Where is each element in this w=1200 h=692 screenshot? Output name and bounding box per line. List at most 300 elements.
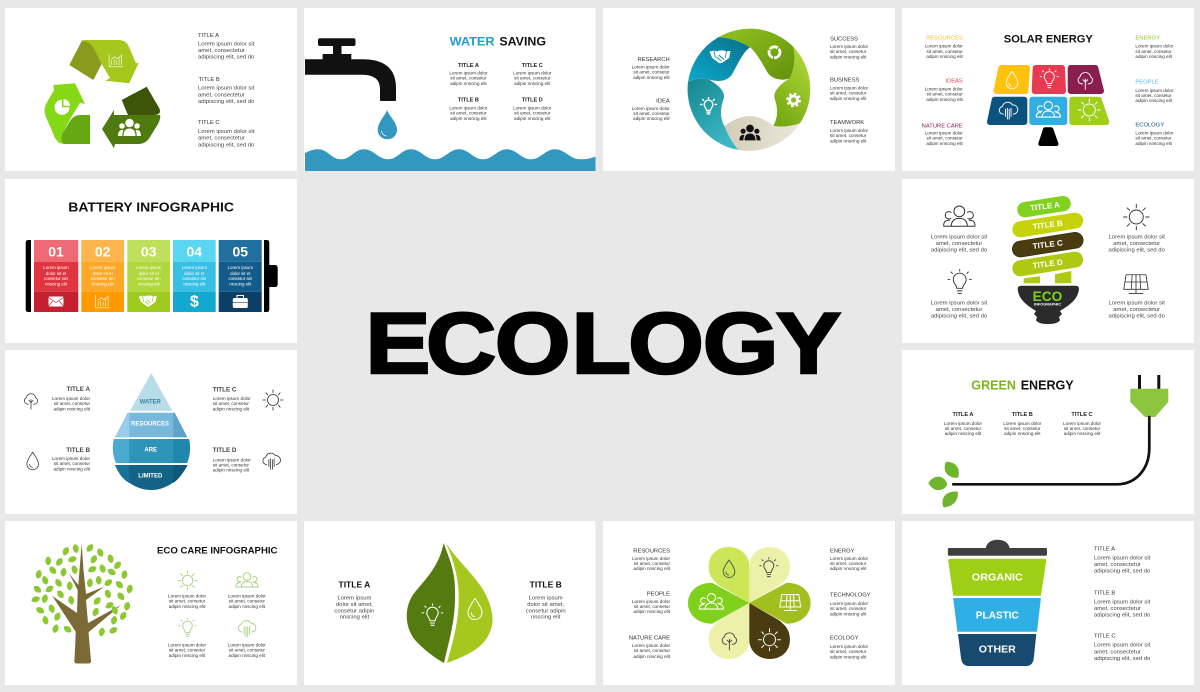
text block: title b: sit amet, consetur bbox=[450, 110, 487, 116]
text block: ideas: Lorem ipsum dolor bbox=[925, 86, 963, 92]
battery cell 03: Lorem ipsum bbox=[136, 265, 162, 270]
text block: resources: Lorem ipsum dolor bbox=[632, 556, 670, 561]
battery cell 03: dolor sit et bbox=[139, 271, 160, 276]
bulb bar: title b: TITLE B bbox=[1032, 219, 1063, 231]
battery right cap bbox=[264, 240, 278, 312]
text block: ecology: adipin nnscing elit bbox=[1135, 141, 1173, 146]
text block: sun: Lorem ipsum dolor bbox=[168, 594, 206, 598]
text block: title a: adipiscing elit, sed do bbox=[1094, 569, 1151, 575]
battery cell 03 bbox=[127, 240, 170, 312]
battery cell 02: 02 bbox=[95, 244, 111, 260]
text block: nature care bbox=[629, 636, 671, 659]
text block: title d: Lorem ipsum dolor bbox=[513, 106, 552, 110]
text block: title c: TITLE C bbox=[198, 120, 220, 126]
text block: title b: consetur adipin bbox=[526, 608, 566, 614]
text block: title d: TITLE D bbox=[213, 447, 237, 454]
text block: ecology: Lorem ipsum dolor bbox=[830, 644, 869, 649]
text block: success bbox=[830, 36, 869, 60]
text block: title c: amet, consectetur bbox=[1094, 649, 1141, 655]
text block: ecology: sit amet, consetur bbox=[1135, 136, 1172, 140]
text block: nature care bbox=[922, 123, 964, 146]
text block: title a: TITLE A bbox=[66, 386, 90, 393]
text block: resources: RESOURCES bbox=[926, 35, 963, 41]
drop segment: water: WATER bbox=[140, 399, 162, 405]
leaf half: light bbox=[446, 543, 493, 663]
battery cell 04: 04 bbox=[187, 244, 202, 260]
text block: teamwork: Lorem ipsum dolor bbox=[830, 128, 869, 133]
text block: ecology: ECOLOGY bbox=[1135, 123, 1164, 129]
text block: title a: Lorem ipsum dolor bbox=[449, 70, 488, 76]
text block: people: Lorem ipsum dolor bbox=[632, 599, 670, 604]
text block: energy: Lorem ipsum dolor bbox=[830, 556, 869, 561]
water waves bbox=[305, 149, 596, 171]
text block: bulb: amet, consectetur bbox=[936, 307, 982, 313]
leaf half: dark bbox=[407, 543, 455, 663]
text block: success: Lorem ipsum dolor bbox=[830, 44, 869, 49]
text block: title c: Lorem ipsum dolor bbox=[513, 70, 552, 76]
power cord bbox=[953, 417, 1149, 484]
text block: title b bbox=[52, 447, 91, 472]
heading: green energy: ENERGY bbox=[1021, 379, 1074, 393]
text block: resources: RESOURCES bbox=[633, 549, 670, 555]
text block: resources: Lorem ipsum dolor bbox=[925, 44, 963, 48]
text block: title c bbox=[198, 120, 255, 148]
icon: leaves bbox=[928, 462, 959, 507]
icon: cloud bbox=[263, 453, 281, 469]
icon: cloud bbox=[238, 621, 256, 637]
text block: energy: ENERGY bbox=[830, 549, 855, 555]
text block: title d: Lorem ipsum dolor bbox=[213, 458, 251, 462]
tree leaves bbox=[30, 543, 134, 637]
text block: title a: amet, consectetur bbox=[198, 48, 245, 54]
heading: solar energy: SOLAR ENERGY bbox=[1004, 33, 1093, 45]
panel: water drop pyramid bbox=[5, 350, 297, 514]
text block: ideas: adipin nnscing elit bbox=[926, 97, 964, 102]
text block: resources: sit amet, consetur bbox=[634, 561, 670, 566]
panel: eco bulb bbox=[902, 179, 1194, 343]
text block: sun: amet, consectetur bbox=[1113, 241, 1160, 247]
text block: title a: Lorem ipsum bbox=[337, 596, 372, 602]
text block: title b bbox=[526, 579, 566, 621]
icon: bulb bbox=[948, 269, 971, 293]
battery cell 05 bbox=[219, 240, 262, 312]
text block: people: PEOPLE bbox=[1135, 79, 1159, 85]
battery cell 04: Lorem ipsum bbox=[182, 265, 207, 270]
text block: technology: Lorem ipsum dolor bbox=[830, 601, 869, 606]
text block: title a: TITLE A bbox=[458, 63, 479, 69]
battery cell 02 bbox=[81, 240, 124, 312]
text block: energy bbox=[1135, 35, 1174, 59]
panel: battery infographic bbox=[5, 179, 297, 343]
bulb base: ECO bbox=[1033, 288, 1062, 304]
text block: title a: adipiscing elit, sed do bbox=[198, 55, 255, 61]
panel: eco care tree bbox=[5, 521, 297, 685]
bin layer: other: OTHER bbox=[979, 644, 1016, 656]
battery cell 05: 05 bbox=[233, 244, 248, 260]
text block: title d bbox=[213, 447, 251, 472]
text block: title b: TITLE B bbox=[1012, 412, 1033, 418]
text block: title c bbox=[1094, 634, 1151, 662]
text block: technology: sit amet, consetur bbox=[830, 606, 867, 611]
bulb base: INFOGRAPHIC bbox=[1034, 302, 1062, 306]
text block: cloud: adipin nnscing elit bbox=[229, 653, 266, 658]
solar panel cells bbox=[990, 68, 1106, 122]
text block: people: amet, consectetur bbox=[936, 241, 982, 247]
battery cell 04: dolor sit et bbox=[184, 271, 205, 276]
text block: bulb: adipiscing elit, sed do bbox=[931, 314, 988, 320]
text block: title d: sit amet, consetur bbox=[213, 462, 249, 468]
text block: title c bbox=[1063, 412, 1101, 436]
text block: title b: adipin nnscing elit bbox=[53, 466, 91, 472]
text block: title a bbox=[449, 63, 488, 86]
text block: title c: Lorem ipsum dolor bbox=[1063, 421, 1101, 426]
text block: ecology: Lorem ipsum dolor bbox=[1135, 130, 1174, 136]
heading: water saving: SAVING bbox=[499, 37, 546, 49]
solar panel stand bbox=[1038, 127, 1058, 146]
text block: title c: adipiscing elit, sed do bbox=[1094, 656, 1151, 662]
panel: flower bbox=[603, 521, 895, 685]
drop segment: limited: LIMITED bbox=[138, 474, 163, 480]
text block: title c: adipin nnscing elit bbox=[1064, 431, 1101, 436]
text block: title b: TITLE B bbox=[530, 579, 562, 589]
text block: title d bbox=[513, 97, 552, 121]
text block: title c: adipin nnscing elit bbox=[213, 406, 250, 412]
text block: energy: adipin nnscing elit bbox=[1135, 54, 1173, 59]
text block: title b: nnscing elit bbox=[531, 615, 561, 621]
text block: energy: ENERGY bbox=[1135, 35, 1160, 41]
bin lid bbox=[948, 540, 1047, 556]
text block: title b: amet, consectetur bbox=[198, 92, 245, 98]
text block: people: sit amet, consetur bbox=[1135, 93, 1172, 98]
bulb bar: title c: TITLE C bbox=[1032, 238, 1063, 251]
text block: success: adipin nnscing elit bbox=[830, 54, 867, 60]
text block: title b: adipiscing elit, sed do bbox=[1094, 613, 1151, 619]
drop segment: resources bbox=[115, 413, 187, 437]
text block: teamwork: sit amet, consetur bbox=[830, 133, 867, 138]
heading: water saving bbox=[450, 37, 546, 49]
bin layer: other bbox=[958, 634, 1036, 666]
text block: nature care: NATURE CARE bbox=[922, 123, 963, 129]
text block: teamwork: adipin nnscing elit bbox=[830, 138, 867, 144]
text block: title a bbox=[944, 412, 982, 436]
battery cell 05: dolor sit et bbox=[230, 271, 251, 276]
drop segment: resources: RESOURCES bbox=[131, 422, 169, 428]
text block: title a: dolor sit amet, bbox=[336, 602, 373, 608]
text block: title a: amet, consectetur bbox=[1094, 562, 1141, 568]
text block: title b: adipin nnscing elit bbox=[1004, 431, 1041, 436]
text block: title d: adipin nnscing elit bbox=[514, 116, 551, 121]
text block: people: sit amet, consetur bbox=[634, 604, 670, 609]
icon: gear bbox=[787, 94, 800, 106]
panel: waste bin bbox=[902, 521, 1194, 685]
battery cell 05: Lorem ipsum bbox=[228, 265, 253, 270]
text block: title b: Lorem ipsum dolor sit bbox=[198, 86, 255, 92]
text block: business: adipin nnscing elit bbox=[830, 96, 867, 101]
text block: title c: sit amet, consetur bbox=[213, 401, 249, 406]
text block: nature care: Lorem ipsum dolor bbox=[925, 130, 963, 136]
battery cell 01: nnscing elit bbox=[45, 282, 68, 286]
text block: people: adipin nnscing elit bbox=[633, 609, 671, 614]
text block: title c: sit amet, consetur bbox=[514, 76, 551, 80]
battery cell 02: dolor sit et bbox=[93, 271, 114, 276]
icon: donut bbox=[769, 47, 780, 58]
text block: research: adipin nnscing elit bbox=[633, 75, 670, 80]
text block: people: adipiscing elit, sed do bbox=[931, 248, 988, 254]
icon: solar panel bbox=[1124, 275, 1148, 293]
bulb bar: title d bbox=[1011, 250, 1084, 277]
icon: handshake bbox=[710, 50, 730, 63]
text block: title c bbox=[513, 63, 552, 86]
text block: idea: sit amet, consetur bbox=[633, 111, 670, 116]
text block: people: adipin nnscing elit bbox=[229, 604, 266, 609]
text block: title c: TITLE C bbox=[522, 63, 543, 69]
text block: title b: sit amet, consetur bbox=[54, 461, 90, 466]
text block: title c: Lorem ipsum dolor sit bbox=[198, 129, 255, 135]
recycling arrow: left bbox=[44, 83, 90, 144]
text block: teamwork: TEAMWORK bbox=[830, 120, 864, 126]
icon: people bbox=[236, 573, 258, 587]
text block: title a: adipin nnscing elit bbox=[945, 431, 982, 436]
text block: resources: adipin nnscing elit bbox=[926, 54, 964, 59]
drop segment: limited bbox=[115, 465, 188, 490]
text block: people bbox=[228, 594, 266, 609]
text block: title c: TITLE C bbox=[1071, 412, 1093, 418]
text block: title a: TITLE A bbox=[1094, 546, 1115, 552]
text block: people: Lorem ipsum dolor sit bbox=[931, 234, 988, 240]
drop segment: are: ARE bbox=[144, 447, 157, 453]
text block: title b: TITLE B bbox=[458, 97, 479, 103]
text block: sun: adipin nnscing elit bbox=[169, 604, 206, 609]
icon: people bbox=[944, 206, 975, 226]
panel: recycling bbox=[5, 8, 297, 171]
text block: title b: amet, consectetur bbox=[1094, 606, 1141, 612]
drop segment: water bbox=[130, 373, 172, 411]
panel: solar energy bbox=[902, 8, 1194, 171]
text block: success: sit amet, consetur bbox=[830, 49, 867, 54]
panel: star cycle bbox=[603, 8, 895, 171]
text block: ideas bbox=[925, 78, 964, 102]
bulb connectors bbox=[1024, 271, 1071, 283]
text block: ecology bbox=[1135, 123, 1174, 146]
text block: people bbox=[931, 234, 988, 254]
text block: nature care: adipin nnscing elit bbox=[633, 654, 671, 659]
drop segment: are bbox=[113, 439, 190, 463]
text block: title a bbox=[52, 386, 91, 412]
text block: title a: TITLE A bbox=[339, 579, 370, 589]
plug bbox=[1130, 375, 1168, 417]
text block: title a: adipin nnscing elit bbox=[450, 81, 487, 86]
text block: title c: Lorem ipsum dolor sit bbox=[1094, 643, 1151, 649]
text block: resources: sit amet, consetur bbox=[927, 49, 963, 54]
text block: title c: sit amet, consetur bbox=[1064, 426, 1101, 431]
tree trunk bbox=[52, 543, 121, 664]
bulb bar: title a: TITLE A bbox=[1030, 200, 1061, 213]
text block: bulb: Lorem ipsum dolor sit bbox=[931, 300, 988, 306]
heading: green energy bbox=[971, 379, 1074, 393]
text block: people: PEOPLE bbox=[647, 592, 670, 598]
text block: title a: adipin nnscing elit bbox=[53, 406, 91, 412]
text block: title b bbox=[449, 97, 488, 121]
battery cell 04: nnscing elit bbox=[183, 282, 206, 286]
recycling arrow: top bbox=[69, 40, 139, 83]
text block: success: SUCCESS bbox=[830, 36, 858, 42]
text block: cloud: sit amet, consetur bbox=[229, 648, 265, 652]
battery cell 05: nnscing elit bbox=[229, 282, 252, 286]
text block: idea: adipin nnscing elit bbox=[633, 116, 670, 121]
text block: title d: TITLE D bbox=[522, 97, 543, 103]
text block: research: Lorem ipsum dolor bbox=[632, 64, 670, 70]
text block: energy bbox=[830, 549, 869, 571]
text block: cloud: Lorem ipsum dolor bbox=[228, 642, 266, 648]
text block: nature care: Lorem ipsum dolor bbox=[632, 643, 670, 648]
icon: sun bbox=[1123, 204, 1149, 230]
panel: water saving bbox=[304, 8, 596, 171]
battery cell 03: 03 bbox=[141, 244, 157, 260]
text block: title c bbox=[213, 386, 251, 412]
text block: sun bbox=[1109, 234, 1166, 254]
flower petal: top left bbox=[709, 547, 749, 603]
text block: bulb bbox=[931, 300, 988, 320]
battery cell 01 bbox=[34, 240, 78, 312]
text block: title b: sit amet, consetur bbox=[1004, 426, 1041, 431]
text block: technology: TECHNOLOGY bbox=[830, 593, 871, 599]
icon: sun bbox=[178, 571, 197, 590]
text block: title b: Lorem ipsum dolor bbox=[449, 106, 488, 110]
text block: bulb: sit amet, consetur bbox=[169, 648, 206, 652]
text block: research: sit amet, consetur bbox=[633, 70, 670, 74]
text block: energy: sit amet, consetur bbox=[830, 561, 867, 566]
text block: research: RESEARCH bbox=[637, 57, 670, 63]
text block: solar panel: amet, consectetur bbox=[1113, 307, 1160, 313]
text block: idea: IDEA bbox=[656, 99, 670, 105]
battery cell 02: consetur ain bbox=[91, 276, 115, 281]
text block: title a bbox=[334, 579, 374, 621]
heading: water saving: WATER bbox=[450, 37, 495, 49]
battery cell 04 bbox=[173, 240, 216, 312]
battery cell 04: consetur ain bbox=[182, 276, 207, 281]
text block: title a: nnscing elit bbox=[340, 615, 369, 621]
text block: title b: Lorem ipsum dolor sit bbox=[1094, 600, 1151, 606]
battery cell 01: consetur ain bbox=[44, 276, 69, 281]
icon: faucet bbox=[305, 38, 396, 101]
bin layer: organic bbox=[948, 559, 1046, 596]
battery cell 02: nnscing elit bbox=[92, 282, 114, 286]
text block: ideas: sit amet, consetur bbox=[927, 92, 963, 96]
battery cell 05: consetur ain bbox=[228, 276, 253, 281]
text block: ecology: sit amet, consetur bbox=[830, 649, 867, 654]
icon: people bbox=[739, 125, 761, 140]
flower petal: bottom right bbox=[749, 603, 790, 659]
text block: title b: Lorem ipsum dolor bbox=[1003, 421, 1042, 426]
battery left cap bbox=[26, 240, 31, 312]
battery cell 02: Lorem ipsum bbox=[90, 265, 116, 270]
text block: people: Lorem ipsum dolor bbox=[1135, 88, 1174, 93]
text block: title a: Lorem ipsum dolor sit bbox=[198, 41, 255, 47]
text block: idea: Lorem ipsum dolor bbox=[632, 106, 670, 111]
bulb base bbox=[1018, 286, 1079, 324]
text block: people bbox=[1135, 79, 1174, 103]
text block: resources: adipin nnscing elit bbox=[633, 566, 671, 571]
text block: title b bbox=[1094, 591, 1151, 619]
icon: sun bbox=[263, 390, 283, 410]
icon: bulb bbox=[701, 98, 716, 114]
solar panel icons bbox=[999, 69, 1100, 121]
text block: title d: adipin nnscing elit bbox=[213, 468, 250, 472]
text block: technology bbox=[830, 593, 871, 616]
text block: title a: Lorem ipsum dolor bbox=[944, 421, 982, 426]
cycle diagram bbox=[688, 29, 810, 151]
flower petal: top right bbox=[749, 547, 790, 603]
icon: bulb bbox=[179, 618, 196, 636]
text block: title b: Lorem ipsum bbox=[529, 596, 563, 602]
battery cell 04: $ bbox=[190, 294, 199, 310]
text block: title a: Lorem ipsum dolor bbox=[52, 396, 90, 401]
text block: sun bbox=[168, 594, 206, 609]
text block: energy: adipin nnscing elit bbox=[830, 566, 867, 571]
text block: business bbox=[830, 78, 869, 101]
text block: title b: adipiscing elit, sed do bbox=[198, 99, 255, 105]
text block: title a bbox=[1094, 546, 1151, 575]
flower petal: bottom left bbox=[709, 603, 749, 659]
text block: bulb: Lorem ipsum dolor bbox=[168, 642, 206, 648]
text block: title c: adipin nnscing elit bbox=[514, 81, 551, 86]
bulb bar: title d: TITLE D bbox=[1032, 258, 1063, 270]
text block: title a: sit amet, consetur bbox=[54, 401, 90, 406]
text block: ecology: adipin nnscing elit bbox=[830, 654, 867, 660]
bin layer: plastic: PLASTIC bbox=[976, 609, 1019, 621]
bulb bar: title b bbox=[1011, 211, 1084, 238]
text block: solar panel bbox=[1109, 300, 1166, 320]
battery cell 03: nnscing elit bbox=[138, 282, 160, 286]
text block: title a: TITLE A bbox=[198, 33, 219, 39]
text block: ideas: IDEAS bbox=[945, 78, 963, 84]
text block: business: Lorem ipsum dolor bbox=[830, 86, 869, 90]
text block: title c: TITLE C bbox=[1094, 634, 1116, 640]
text block: people: sit amet, consetur bbox=[229, 598, 265, 604]
text block: title a: Lorem ipsum dolor sit bbox=[1094, 555, 1151, 561]
battery cell 01: Lorem ipsum bbox=[43, 265, 69, 270]
text block: nature care: NATURE CARE bbox=[629, 636, 670, 642]
text block: people bbox=[632, 592, 671, 614]
text block: title b: TITLE B bbox=[66, 447, 90, 454]
text block: cloud bbox=[228, 642, 266, 658]
battery cell 01: dolor sit et bbox=[46, 271, 67, 276]
text block: people: Lorem ipsum dolor bbox=[228, 594, 266, 598]
text block: business: sit amet, consetur bbox=[830, 90, 867, 96]
text block: title c: adipiscing elit, sed do bbox=[198, 142, 255, 148]
text block: sun: Lorem ipsum dolor sit bbox=[1109, 234, 1165, 240]
text block: teamwork bbox=[830, 120, 869, 144]
text block: nature care: sit amet, consetur bbox=[634, 648, 670, 653]
text block: title a bbox=[198, 33, 255, 61]
text block: nature care: adipin nnscing elit bbox=[926, 141, 964, 146]
bulb bar: title c bbox=[1011, 231, 1084, 258]
text block: solar panel: adipiscing elit, sed do bbox=[1109, 314, 1166, 320]
main title: ECOLOGY bbox=[366, 296, 841, 392]
text block: title b: TITLE B bbox=[1094, 591, 1115, 597]
text block: sun: sit amet, consetur bbox=[169, 598, 206, 604]
text block: bulb: adipin nnscing elit bbox=[169, 653, 206, 658]
text block: title b: adipin nnscing elit bbox=[450, 116, 487, 121]
text block: energy: Lorem ipsum dolor bbox=[1135, 44, 1174, 48]
text block: title b bbox=[198, 77, 255, 105]
text block: ecology bbox=[830, 636, 869, 660]
icon: drop bbox=[27, 452, 39, 470]
battery cell 03: consetur ain bbox=[137, 276, 161, 281]
text block: title c: Lorem ipsum dolor bbox=[213, 396, 251, 401]
text block: title c: amet, consectetur bbox=[198, 136, 245, 142]
text block: title a: sit amet, consetur bbox=[450, 76, 487, 80]
